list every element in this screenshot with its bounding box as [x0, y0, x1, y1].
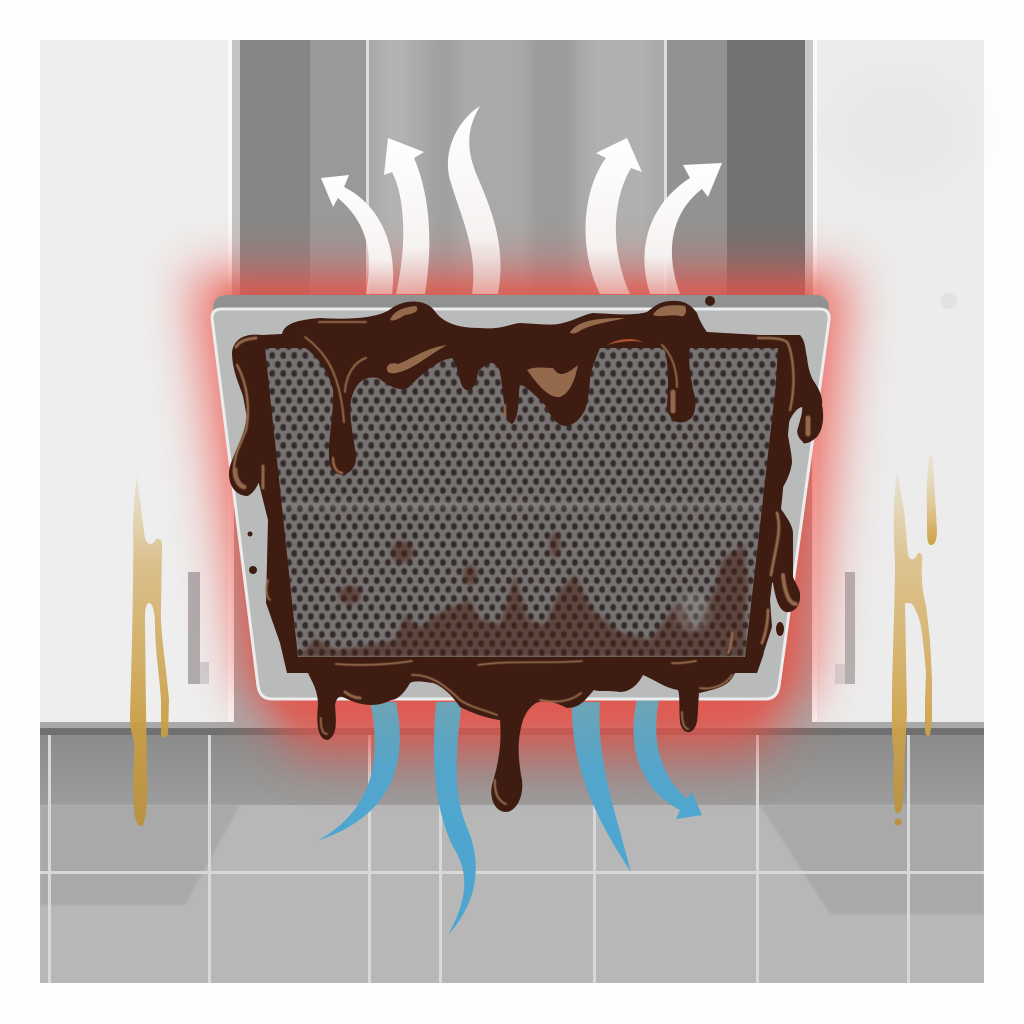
icon: cabinet handle left	[188, 572, 209, 684]
panel: filter frame	[212, 309, 829, 699]
chart: mesh filter screen	[263, 347, 781, 657]
arrow: blue right	[633, 695, 702, 819]
white airflow arrows	[321, 106, 722, 294]
grease blob: bottom with drips	[287, 653, 764, 812]
grease streak left	[130, 475, 169, 826]
panel: right cabinet	[812, 40, 984, 722]
icon: cabinet handle right	[835, 572, 855, 684]
grease band around mesh	[234, 337, 797, 673]
grease blob: sides	[766, 503, 800, 612]
grease blob: top with drips	[229, 301, 823, 510]
grease drip right upper	[927, 455, 937, 545]
panel: hood top lip	[213, 295, 829, 322]
grease streak right	[892, 472, 932, 826]
arrow: blue left	[317, 702, 400, 841]
arrow: blue centre	[434, 702, 476, 935]
blue airflow arrows	[317, 695, 702, 935]
arrow: white up second	[384, 138, 429, 294]
panel: left cabinet	[40, 40, 234, 722]
grease highlights top	[234, 305, 808, 488]
arrow: white up-left	[321, 175, 393, 294]
grease spots on frame	[248, 296, 784, 636]
arrow: white up right	[586, 138, 642, 294]
arrow: blue third	[572, 702, 631, 872]
arrow: white far right	[644, 163, 722, 294]
red heat glow	[190, 272, 850, 755]
panel: exhaust duct	[232, 30, 813, 730]
grease highlights bottom	[267, 513, 796, 804]
arrow: white central wave	[448, 106, 501, 294]
grease stains on mesh	[298, 532, 748, 657]
panel: backsplash tiles	[0, 722, 1024, 983]
